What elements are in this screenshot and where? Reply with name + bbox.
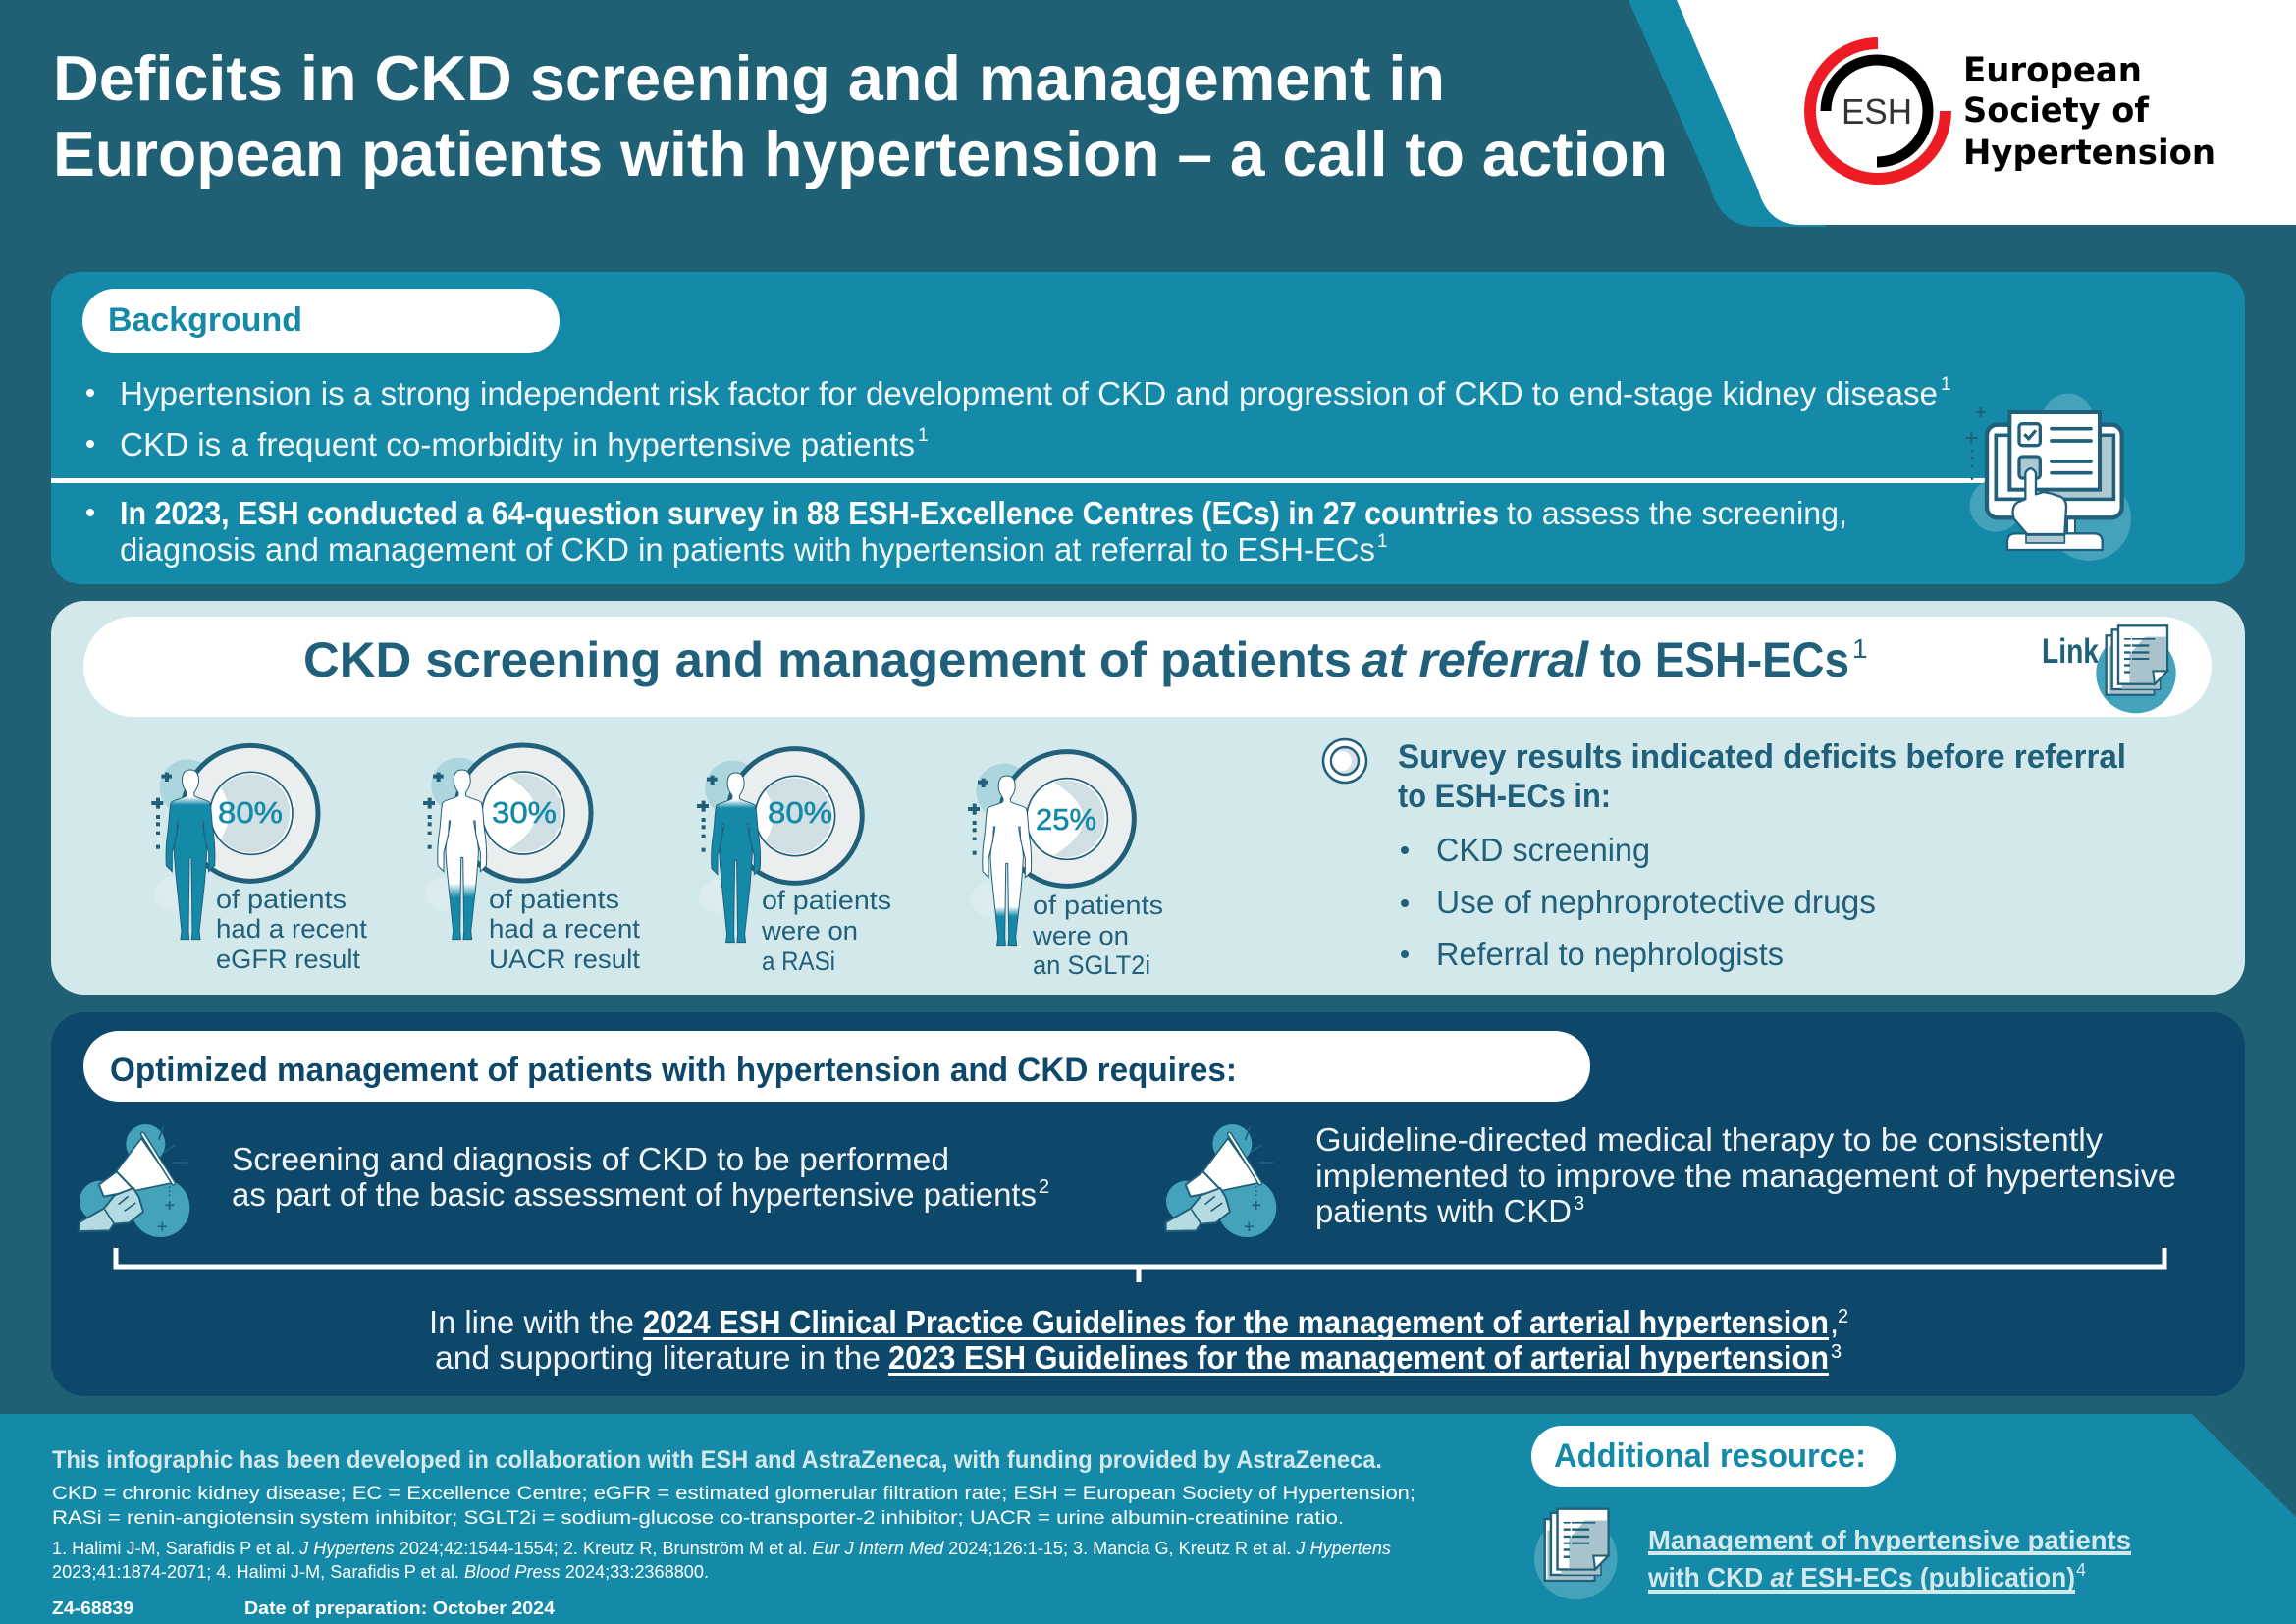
- stat: 30% UACR: [423, 745, 641, 974]
- guideline references: 2: [1838, 1306, 1848, 1327]
- survey deficits text: Use of nephroprotective drugs: [1436, 884, 1876, 920]
- guideline references: In line with the: [429, 1304, 634, 1340]
- references: 2023;41:1874-2071; 4. Halimi J-M, Sarafidis P et al. Blood Press 2024;33:2368800.: [52, 1562, 709, 1582]
- stat: 80% RASi: of patients: [762, 886, 891, 915]
- heading: CKD screening at referral: CKD screening and management of patients: [303, 632, 1352, 687]
- icon: megaphone right: [1166, 1124, 1276, 1237]
- document code and date: Z4-68839: [52, 1598, 133, 1618]
- references: [52, 1539, 1391, 1582]
- guideline references: ,: [1830, 1304, 1839, 1340]
- funding statement: This infographic has been developed in collaboration with ESH and AstraZeneca, with funding provided by AstraZeneca.: [52, 1446, 1382, 1474]
- background bullets: to assess the screening,: [1507, 495, 1847, 531]
- stat: 80% RASi: a RASi: [762, 947, 835, 976]
- background bullets: 1: [1377, 531, 1388, 552]
- text: guideline-directed therapy: patients with CKD: [1315, 1193, 1572, 1229]
- title: Deficits in CKD screening and management in: [53, 42, 1445, 114]
- heading: CKD screening at referral: to ESH-ECs: [1600, 632, 1849, 687]
- link with document icon: [2042, 625, 2176, 713]
- survey deficits text: Referral to nephrologists: [1436, 936, 1784, 972]
- stat: 25% SGLT2i: of patients: [1033, 891, 1163, 920]
- document code and date: [52, 1598, 555, 1618]
- guideline references: 3: [1831, 1341, 1842, 1363]
- background bullets: Hypertension is a strong independent risk factor for development of CKD and progression of CKD to end-stage kidney disease: [120, 375, 1938, 411]
- abbreviations: [52, 1484, 1415, 1529]
- stat: 25% SGLT2i: were on: [1032, 921, 1129, 950]
- survey deficits text: Survey results indicated deficits before referral: [1398, 738, 2126, 776]
- text: guideline-directed therapy: 3: [1574, 1193, 1584, 1215]
- survey deficits text: [1398, 738, 2126, 972]
- heading: background: [82, 289, 560, 353]
- background bullets: diagnosis and management of CKD in patients with hypertension at referral to ESH-ECs: [120, 531, 1375, 568]
- references: 1. Halimi J-M, Sarafidis P et al. J Hypertens 2024;42:1544-1554; 2. Kreutz R, Brunström M et al. Eur J Intern Med 2024;126:1-15; 3. Mancia G, Kreutz R et al. J Hypertens: [52, 1539, 1391, 1558]
- icon: target bullet: [1323, 739, 1366, 783]
- stat: 80% RASi: were on: [761, 916, 858, 946]
- stat: 30% UACR: 30%: [492, 795, 557, 830]
- stat: 80% eGFR: 80%: [218, 795, 283, 830]
- logo: ESH rings: ESH: [1842, 91, 1912, 132]
- stat: 80% eGFR: had a recent: [216, 914, 368, 944]
- panel: optimized management: [51, 1012, 2245, 1396]
- stat: 80% eGFR: eGFR result: [216, 945, 360, 974]
- panel: CKD screening results: [51, 601, 2245, 995]
- icon: publication document: [1534, 1509, 1618, 1599]
- publication link: Management of hypertensive patients: [1648, 1525, 2131, 1555]
- link with document icon: Link: [2042, 632, 2099, 671]
- panel: background: [51, 272, 2245, 584]
- text: guideline-directed therapy: Guideline-directed medical therapy to be consistently: [1315, 1121, 2104, 1158]
- guideline references: 2023 ESH Guidelines for the management of arterial hypertension: [888, 1339, 1829, 1376]
- logo: ESH rings: [1810, 43, 1946, 179]
- publication link: with CKD at ESH-ECs (publication): [1647, 1562, 2075, 1593]
- logo: society name: Society of: [1963, 91, 2150, 131]
- publication link: [1647, 1525, 2131, 1594]
- icon: survey on monitor: [1965, 394, 2131, 561]
- heading: optimized management: [83, 1031, 1590, 1102]
- stat: 80% RASi: 80%: [768, 795, 832, 830]
- text: guideline-directed therapy: [1315, 1121, 2176, 1229]
- icon: megaphone left: [80, 1124, 189, 1237]
- publication link: 4: [2076, 1560, 2086, 1580]
- abbreviations: RASi = renin-angiotensin system inhibitor; SGLT2i = sodium-glucose co-transporter-2 inhibitor; UACR = urine albumin-creatinine ratio.: [52, 1508, 1344, 1529]
- stat: 30% UACR: of patients: [489, 885, 619, 914]
- survey deficits text: to ESH-ECs in:: [1398, 778, 1611, 815]
- stat: 25% SGLT2i: 25%: [1036, 802, 1096, 837]
- guideline references: 2024 ESH Clinical Practice Guidelines for the management of arterial hypertension: [643, 1304, 1829, 1340]
- text: screening and diagnosis: as part of the basic assessment of hypertensive patients: [232, 1176, 1037, 1213]
- text: screening and diagnosis: 2: [1039, 1176, 1049, 1198]
- logo: society name: European: [1963, 51, 2142, 90]
- survey deficits text: CKD screening: [1436, 832, 1650, 868]
- background bullets: 1: [918, 425, 929, 446]
- stat: 80% eGFR: of patients: [216, 885, 347, 914]
- background bullets: CKD is a frequent co-morbidity in hypertensive patients: [120, 426, 915, 462]
- text: screening and diagnosis: [232, 1141, 1049, 1213]
- title: European patients with hypertension – a call to action: [53, 118, 1668, 189]
- heading: background: Background: [108, 301, 302, 339]
- guideline references: and supporting literature in the: [435, 1339, 881, 1376]
- stat: 80% eGFR: [151, 745, 368, 974]
- background bullets: In 2023, ESH conducted a 64-question survey in 88 ESH-Excellence Centres (ECs) in 27 countries: [120, 495, 1499, 531]
- heading: CKD screening at referral: at referral: [1362, 632, 1589, 687]
- header logo area: [1629, 0, 2296, 227]
- heading: CKD screening at referral: 1: [1852, 633, 1868, 664]
- background bullets: [51, 374, 1987, 568]
- footer panel: [0, 1414, 2296, 1624]
- abbreviations: CKD = chronic kidney disease; EC = Excellence Centre; eGFR = estimated glomerular filtration rate; ESH = European Society of Hypertension;: [52, 1484, 1415, 1504]
- heading: CKD screening at referral: [83, 617, 2212, 717]
- title: [53, 42, 1668, 189]
- stat: 30% UACR: had a recent: [489, 914, 641, 944]
- heading: additional resource: Additional resource:: [1554, 1437, 1866, 1475]
- background bullets: 1: [1941, 374, 1951, 395]
- heading: additional resource: [1531, 1426, 1896, 1487]
- text: screening and diagnosis: Screening and diagnosis of CKD to be performed: [232, 1141, 949, 1177]
- logo: society name: [1963, 51, 2216, 173]
- stat: 25% SGLT2i: [968, 752, 1163, 980]
- guideline references: [429, 1304, 1848, 1376]
- stat: 80% RASi: [697, 749, 891, 976]
- stat: 30% UACR: UACR result: [489, 945, 641, 974]
- heading: optimized management: Optimized management of patients with hypertension and CKD requires:: [110, 1052, 1237, 1089]
- stat: 25% SGLT2i: an SGLT2i: [1033, 950, 1150, 980]
- logo: society name: Hypertension: [1963, 134, 2216, 173]
- document code and date: Date of preparation: October 2024: [244, 1598, 555, 1618]
- text: guideline-directed therapy: implemented to improve the management of hypertensive: [1315, 1158, 2176, 1194]
- bracket: [116, 1248, 2164, 1282]
